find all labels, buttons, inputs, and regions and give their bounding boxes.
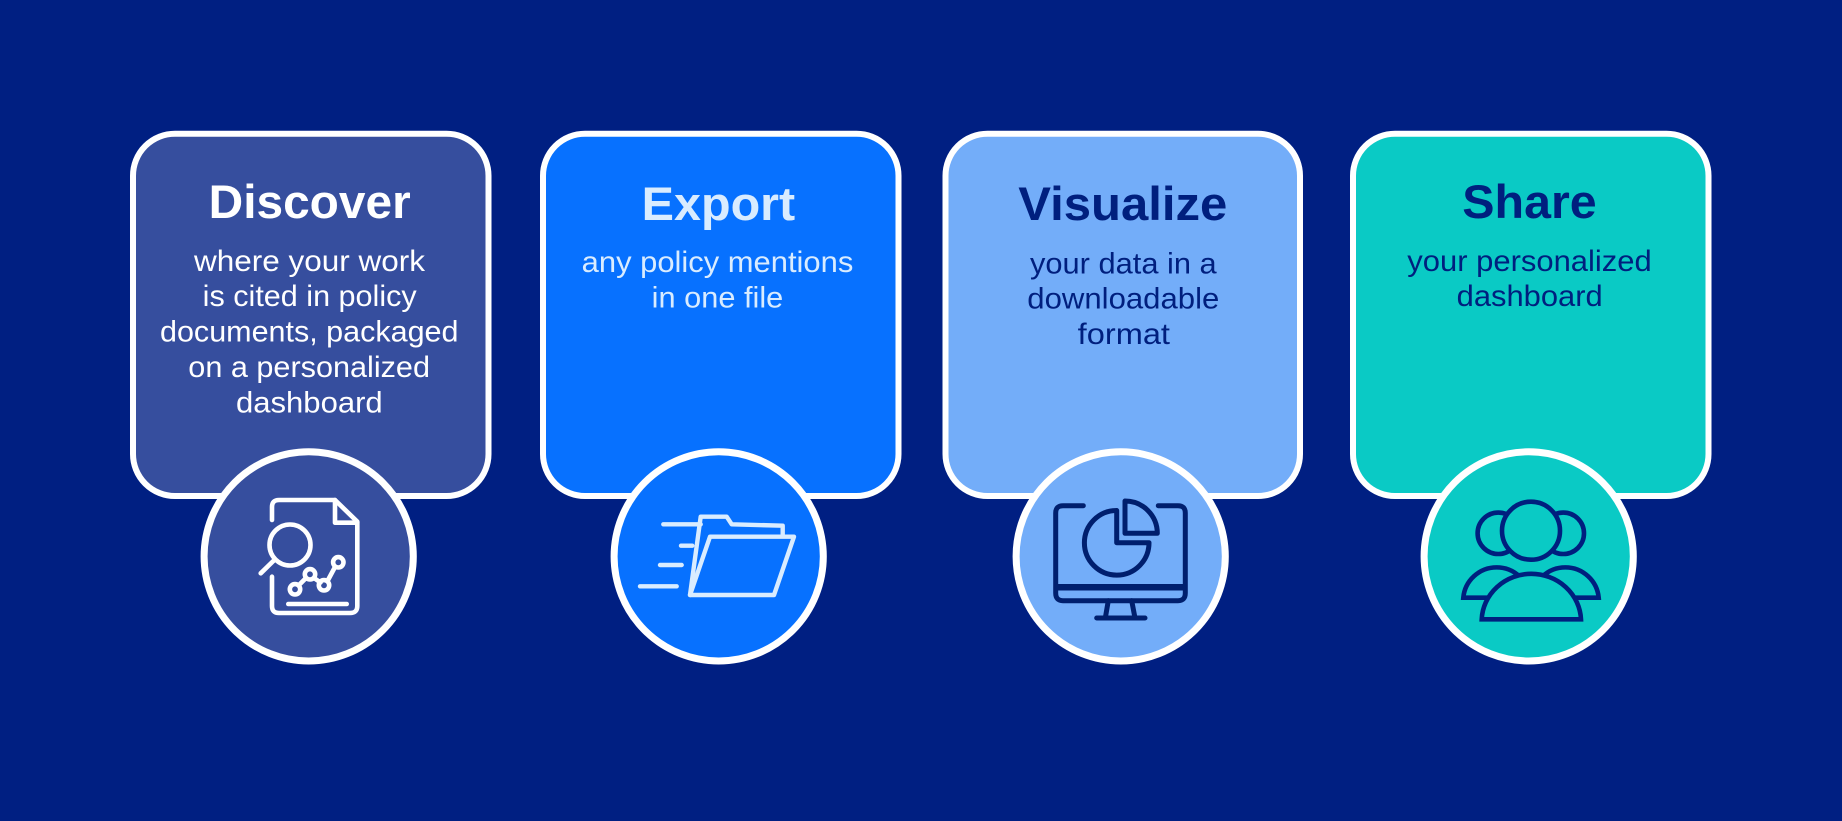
badge circle: discover [204,452,413,661]
panel: export [543,134,898,661]
text block: discover description: on a personalized [188,351,430,384]
text block: export description: in one file [652,282,783,314]
panel: visualize [946,134,1300,661]
card: share [1353,134,1708,496]
heading: visualize: Visualize [1018,177,1227,230]
panel: share [1353,134,1708,661]
badge circle: visualize [1016,452,1225,661]
heading: discover: Discover [209,175,411,228]
text block: share description: your personalized [1407,245,1652,278]
text block: discover description: documents, packaged [160,316,458,348]
card: visualize [946,134,1300,496]
text block: share description [1407,245,1652,313]
text block: visualize description: your data in a [1030,248,1217,280]
text block: discover description: is cited in policy [203,280,417,313]
text block: export description [582,246,853,314]
heading: share: Share [1462,175,1597,228]
text block: visualize description: format [1078,318,1171,351]
text block: share description: dashboard [1457,280,1603,313]
text block: discover description: where your work [193,245,426,278]
text block: visualize description [1027,248,1219,351]
icon: moving folder [640,517,794,595]
text block: discover description [160,245,458,420]
icon: document with magnifier and chart [261,500,357,613]
text block: visualize description: downloadable [1027,282,1219,316]
text block: discover description: dashboard [236,386,383,420]
badge circle: export [614,452,823,661]
badge circle: share [1424,452,1633,661]
heading: export: Export [642,177,796,230]
icon: group of people [1463,502,1599,619]
card: export [543,134,898,496]
card: discover [133,134,488,496]
text block: export description: any policy mentions [582,246,853,279]
panel: discover [133,134,488,661]
icon: monitor with pie chart [1056,501,1185,618]
